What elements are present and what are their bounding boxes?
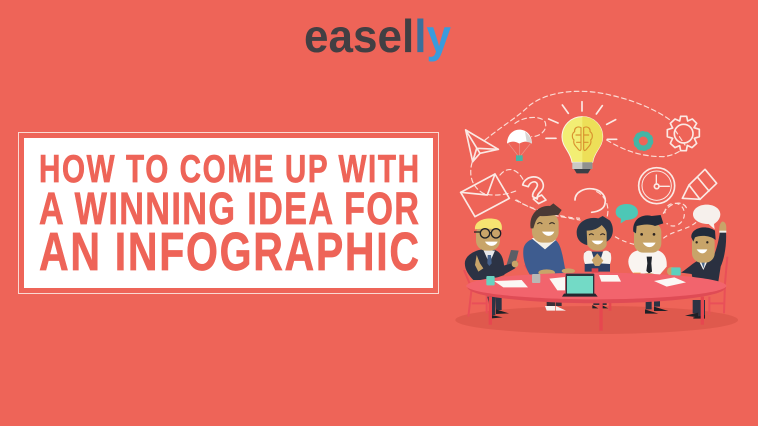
- papers on table: [494, 275, 686, 290]
- title text: A WINNING IDEA FOR: [39, 185, 419, 234]
- icon: clock: [639, 168, 675, 204]
- table: [466, 273, 727, 331]
- icon: parachute: [507, 130, 532, 161]
- title panel: [18, 132, 438, 294]
- illustration: ideas cloud: [461, 91, 717, 220]
- dashed connector lines: [471, 91, 687, 220]
- table shadow: [455, 306, 738, 334]
- person: man raising hand: [667, 222, 726, 282]
- chairs: [464, 257, 727, 317]
- icon: light rays: [546, 102, 617, 139]
- cups: [486, 274, 540, 285]
- icon: gear outline: [667, 116, 699, 151]
- icon: pencil: [682, 169, 717, 199]
- icon: teal gear: [634, 132, 652, 150]
- title text: [39, 148, 419, 282]
- illustration: team around table: [455, 200, 738, 334]
- icon: brain: [572, 127, 592, 150]
- laptop: [562, 274, 598, 297]
- speech bubble: teal: [616, 204, 638, 223]
- icon: speech bubble outline: [575, 189, 605, 212]
- person: man in blue sweater: [523, 203, 575, 276]
- speech bubble: white: [693, 205, 720, 229]
- icon: envelope: [461, 174, 509, 217]
- legs and shoes: [487, 297, 705, 319]
- person: woman: [577, 216, 613, 277]
- person: blond man with glasses: [465, 218, 519, 280]
- title text: HOW TO COME UP WITH: [39, 148, 419, 191]
- logo: easelly: easelly: [304, 10, 451, 62]
- title text: AN INFOGRAPHIC: [39, 223, 419, 282]
- icon: paper plane: [466, 130, 498, 162]
- icon: question mark bulb: [523, 177, 546, 204]
- icon: light bulb: [562, 117, 603, 173]
- person: man with black tie: [628, 215, 667, 281]
- dashed connectors: [515, 200, 698, 245]
